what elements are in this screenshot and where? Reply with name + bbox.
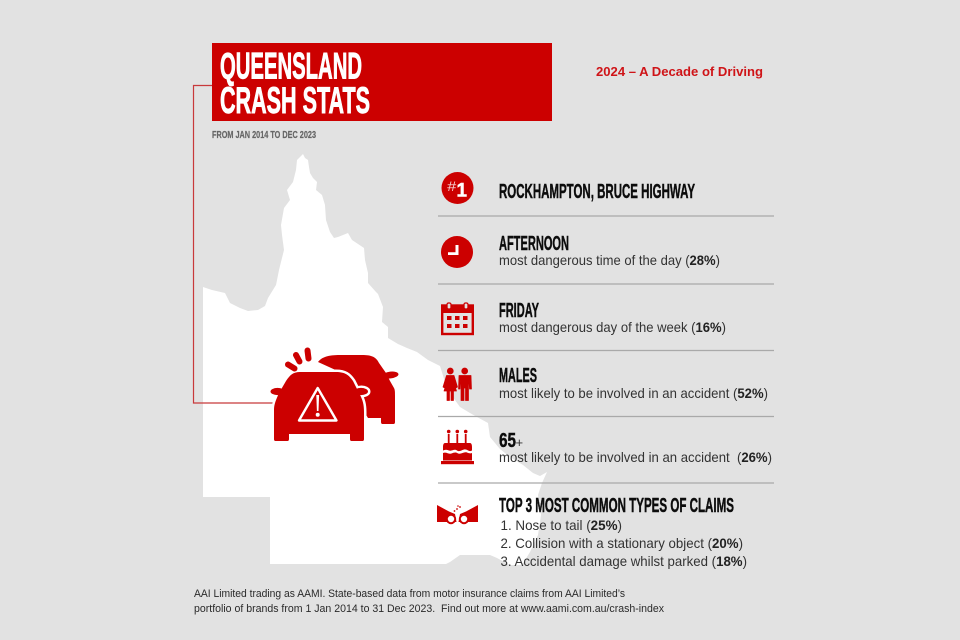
footnote: portfolio of brands from 1 Jan 2014 to 31 Dec 2023. Find out more at www.aami.com.au/crash-index (194, 603, 664, 615)
divider lines (438, 216, 774, 483)
row: day of week: most dangerous day of the week (16%) (499, 319, 726, 335)
row: day of week: FRIDAY (499, 300, 539, 322)
icon: number one badge (442, 172, 474, 204)
row: day of week (499, 300, 726, 335)
row: gender: MALES (499, 365, 537, 387)
row: age (499, 430, 772, 465)
row: time of day (499, 233, 720, 268)
icon: number one badge: 1 (456, 180, 467, 202)
row: top claims: 3. Accidental damage whilst parked (18%) (500, 553, 747, 569)
icon: birthday cake (441, 430, 474, 464)
row: time of day: most dangerous time of the day (28%) (499, 252, 720, 268)
row: gender: most likely to be involved in an accident (52%) (499, 385, 768, 401)
icon: calendar (442, 303, 473, 334)
row: age: + (516, 435, 523, 450)
icon: clock (441, 236, 473, 268)
title block (212, 43, 552, 121)
title block: CRASH STATS (220, 80, 370, 121)
map of Queensland (203, 154, 547, 565)
title block: QUEENSLAND (220, 46, 362, 86)
row: top claims (499, 495, 747, 569)
row: time of day: AFTERNOON (499, 233, 569, 255)
row: top claims: 1. Nose to tail (25%) (500, 517, 622, 533)
row: gender (499, 365, 768, 401)
row: age: 65 (499, 430, 516, 452)
report tagline: 2024 – A Decade of Driving (596, 64, 763, 79)
icon: two cars colliding (437, 505, 478, 523)
icon: woman and man (443, 368, 472, 400)
footnote (194, 588, 664, 615)
icon: number one badge: # (447, 178, 456, 194)
row: top claims: 2. Collision with a stationary object (20%) (500, 535, 743, 551)
connector line (194, 86, 276, 403)
footnote: AAI Limited trading as AAMI. State-based data from motor insurance claims from AAI Limited’s (194, 588, 625, 600)
icon: crashed cars with warning triangle (270, 350, 399, 441)
row: location heading: ROCKHAMPTON, BRUCE HIGHWAY (499, 181, 695, 203)
row: age: most likely to be involved in an accident (26%) (499, 449, 772, 465)
row: top claims: TOP 3 MOST COMMON TYPES OF CLAIMS (499, 495, 734, 517)
date range subtitle: FROM JAN 2014 TO DEC 2023 (212, 130, 316, 141)
